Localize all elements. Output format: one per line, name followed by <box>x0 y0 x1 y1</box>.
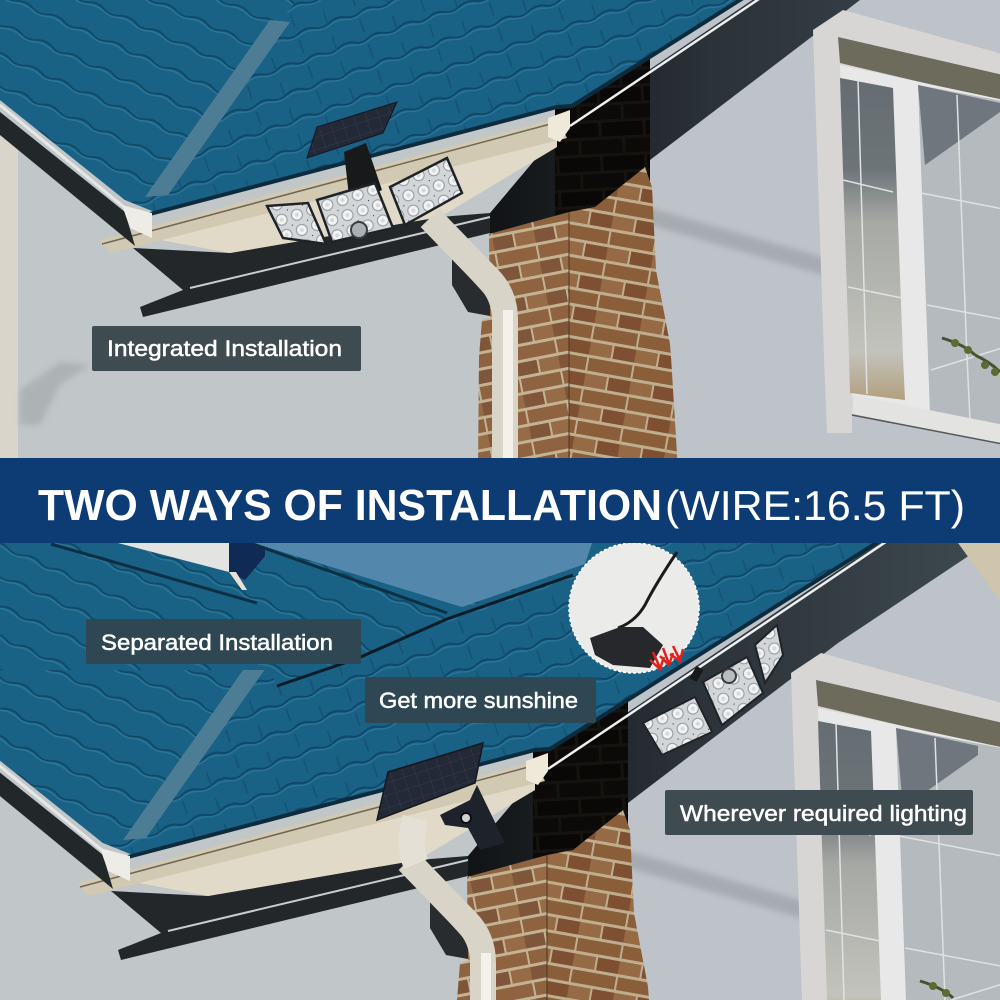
icon: separated lamp heads <box>643 625 783 755</box>
label: Get more sunshine: Get more sunshine <box>379 688 578 713</box>
icon: integrated solar lamp <box>267 102 462 244</box>
icon: cable detail circle <box>569 543 699 673</box>
label: Wherever required lighting: Wherever required lighting <box>680 801 967 826</box>
title banner: TWO WAYS OF INSTALLATION <box>38 481 662 530</box>
label: Separated Installation: Separated Installation <box>101 630 333 655</box>
label: Get more sunshine <box>365 677 596 723</box>
title banner <box>0 458 1000 543</box>
icon: red adjustment arrows <box>650 646 683 669</box>
label: Integrated Installation: Integrated Installation <box>107 336 342 361</box>
sky and upper roof <box>0 543 1000 686</box>
icon: separated solar panel <box>377 743 505 864</box>
label: Separated Installation <box>86 619 361 664</box>
title banner: (WIRE:16.5 FT) <box>665 482 965 529</box>
panel: separated installation photo <box>0 523 1000 1000</box>
label: Wherever required lighting <box>665 790 973 835</box>
label: Integrated Installation <box>92 326 361 371</box>
panel: integrated installation photo <box>0 0 1000 470</box>
